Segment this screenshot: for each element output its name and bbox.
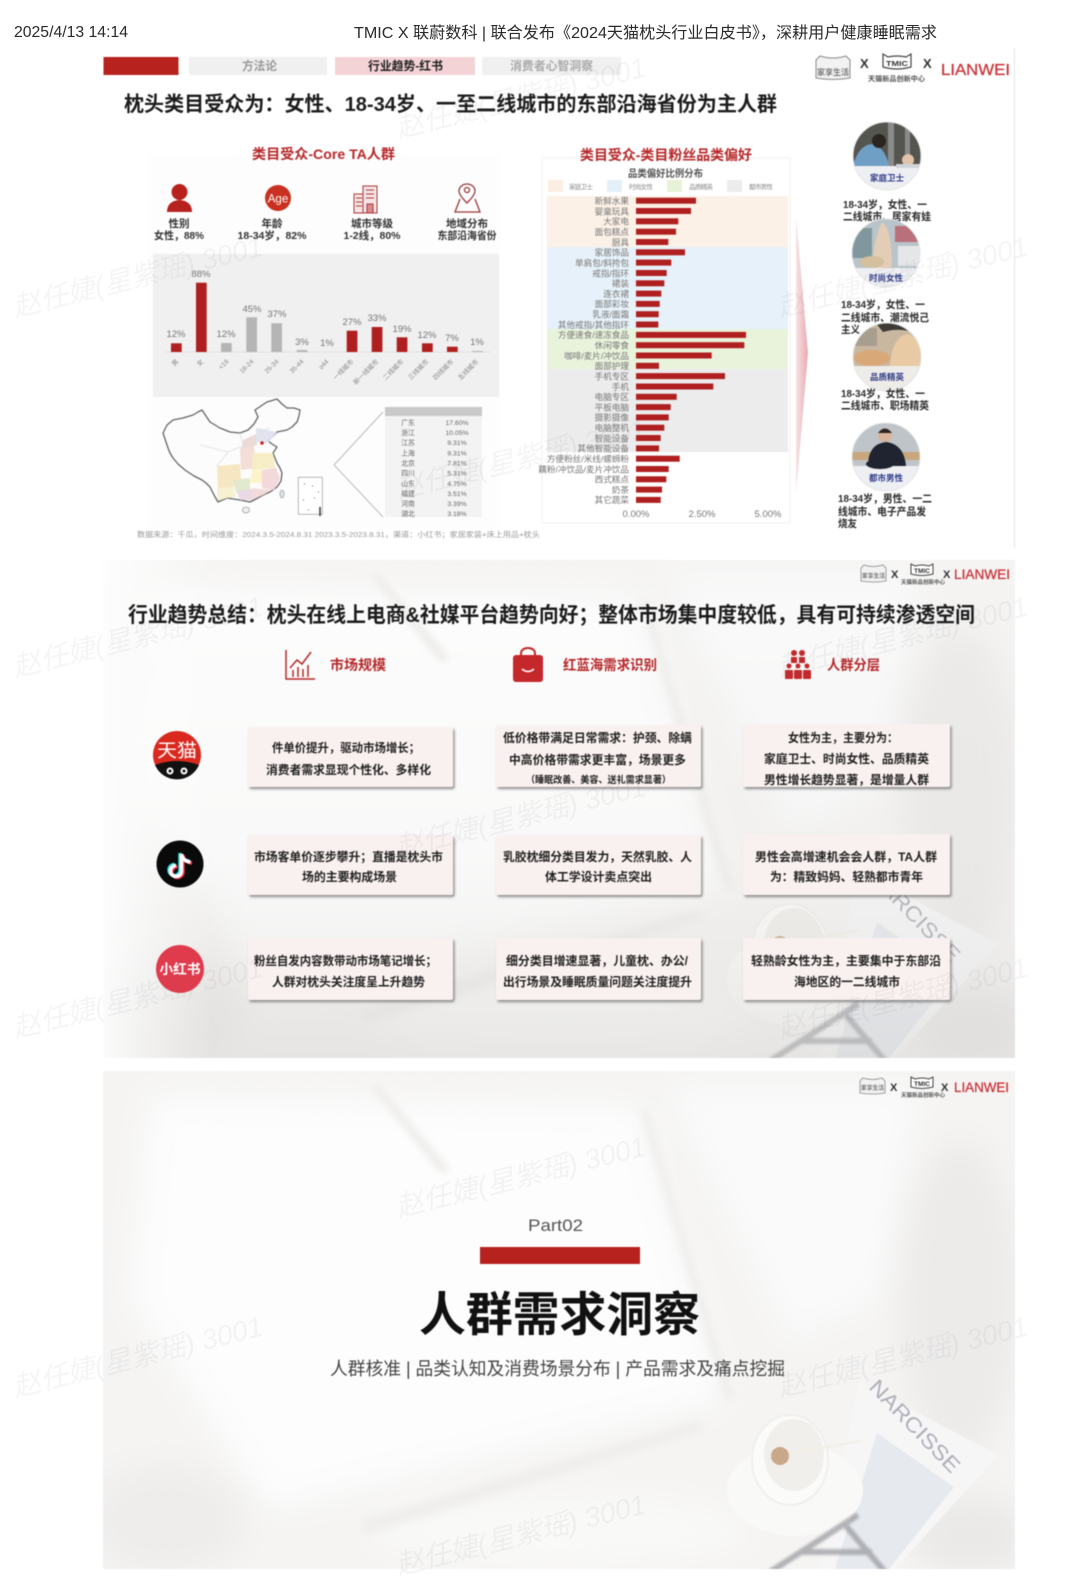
watermarks: 赵任婕(星紫瑶) 3001 bbox=[392, 1131, 649, 1223]
card: Xiaohongshu demand bbox=[496, 938, 701, 1000]
bar chart: audience split: 二线城市 bbox=[381, 357, 406, 382]
persona: urban male: 烧友 bbox=[838, 517, 857, 530]
persona: quality elite: 18-34岁，女性、一 bbox=[841, 387, 925, 400]
icon: Tmall bbox=[153, 731, 201, 779]
column heading: segments: 人群分层 bbox=[827, 657, 880, 673]
persona: fashion woman: 二线城市、潮流悦己 bbox=[841, 311, 929, 324]
card: Tmall segments: 女性为主，主要分为： bbox=[788, 730, 898, 745]
legend: 都市男性 bbox=[749, 182, 774, 191]
bar chart: audience split: 五线城市 bbox=[456, 357, 481, 382]
stat: city tier: 1-2线，80% bbox=[344, 229, 401, 242]
bar chart: preference ratio: 连衣裙 bbox=[603, 288, 629, 299]
bar chart: preference ratio: 乳液/面霜 bbox=[592, 308, 629, 320]
province table with pointer: 3.51% bbox=[447, 491, 467, 498]
card: Douyin market size: 市场客单价逐步攀升；直播是枕头市 bbox=[254, 849, 443, 864]
province table with pointer: 江苏 bbox=[401, 438, 415, 447]
bar chart: audience split: ≥44 bbox=[318, 358, 331, 371]
card: Tmall segments: 家庭卫士、时尚女性、品质精英 bbox=[764, 751, 929, 766]
card: Douyin segments: 为：精致妈妈、轻熟都市青年 bbox=[770, 869, 923, 884]
data source footnote: 数据来源：千瓜，时间维度：2024.3.5-2024.8.31 2023.3.5-2023.8.31，渠道：小红书；家居家装+床上用品+枕头 bbox=[137, 529, 541, 539]
watermarks: 赵任婕(星紫瑶) 3001 bbox=[774, 591, 1031, 683]
stat: city tier: 城市等级 bbox=[351, 217, 393, 230]
bar chart: preference ratio: 藕粉/冲饮品/麦片冲饮品 bbox=[538, 463, 629, 474]
province table with pointer: 山东 bbox=[401, 479, 415, 488]
card: Douyin demand: 体工学设计卖点突出 bbox=[545, 869, 652, 884]
page header: date: 2025/4/13 14:14 bbox=[14, 24, 128, 41]
bar chart: preference ratio: 面部彩妆 bbox=[595, 298, 629, 309]
province table with pointer: 湖北 bbox=[401, 509, 415, 518]
persona: urban male: 都市男性 bbox=[869, 473, 903, 483]
persona: fashion woman: 主义 bbox=[841, 323, 860, 336]
panel: category preference chart bbox=[538, 147, 790, 523]
bar chart: audience split: 12% bbox=[216, 329, 236, 340]
bar chart: audience split: 3% bbox=[295, 337, 309, 348]
bar chart: preference ratio: 大家电 bbox=[603, 216, 629, 227]
persona: fashion woman: 时尚女性 bbox=[869, 273, 903, 283]
partner logos: X bbox=[860, 56, 869, 71]
bar chart: audience split: 33% bbox=[367, 313, 387, 324]
card: Douyin segments bbox=[743, 834, 950, 895]
icon: city buildings bbox=[354, 186, 377, 213]
bar chart: preference ratio: 新鲜水果 bbox=[595, 195, 629, 206]
watermarks: 赵任婕(星紫瑶) 3001 bbox=[392, 52, 649, 144]
card: Xiaohongshu segments: 轻熟龄女性为主，主要集中于东部沿 bbox=[751, 953, 941, 968]
watermarks: 赵任婕(星紫瑶) 3001 bbox=[9, 952, 266, 1044]
partner logos: LIANWEI bbox=[954, 567, 1010, 582]
category bands bbox=[547, 196, 788, 452]
watermarks: 赵任婕(星紫瑶) 3001 bbox=[774, 1311, 1031, 1403]
watermarks: 赵任婕(星紫瑶) 3001 bbox=[9, 1311, 266, 1403]
card: Douyin market size: 场的主要构成场景 bbox=[302, 869, 397, 884]
persona: fashion woman: 18-34岁，女性、一 bbox=[841, 298, 925, 311]
bar chart: preference ratio: 面部护理 bbox=[595, 360, 629, 371]
panel heading: preference: 类目受众-类目粉丝品类偏好 bbox=[580, 147, 752, 163]
bar chart: audience split: 35-44 bbox=[289, 358, 306, 375]
persona: quality elite: 二线城市、职场精英 bbox=[841, 399, 929, 412]
slide 2: industry trend summary bbox=[85, 560, 1030, 1064]
card: Douyin market size bbox=[248, 835, 453, 895]
red divider bar bbox=[480, 1247, 640, 1264]
bar chart: preference ratio: 电脑专区 bbox=[595, 391, 629, 402]
province table with pointer: 9.31% bbox=[447, 450, 467, 458]
watermarks: 赵任婕(星紫瑶) 3001 bbox=[774, 952, 1031, 1044]
card: Xiaohongshu market size bbox=[248, 938, 453, 1000]
card: Xiaohongshu demand: 细分类目增速显著，儿童枕、办公/ bbox=[506, 953, 689, 968]
partner logos: X bbox=[890, 1082, 898, 1094]
background: bedding photo bbox=[85, 560, 1030, 1064]
card: Tmall segments bbox=[743, 724, 950, 787]
card: Tmall demand: 中高价格带需求更丰富，场景更多 bbox=[509, 752, 686, 767]
icon: shopping bag bbox=[513, 648, 543, 682]
province table with pointer: 4.75% bbox=[447, 481, 467, 488]
bar chart: audience split: 7% bbox=[445, 333, 459, 344]
stat: gender: 性别 bbox=[168, 217, 190, 230]
bar chart: audience split: 12% bbox=[166, 329, 186, 340]
arrow to personas bbox=[796, 217, 808, 493]
map of China bbox=[163, 399, 322, 516]
partner logos: X bbox=[943, 569, 951, 581]
background: bedding photo with cup and magazine bbox=[85, 1071, 1030, 1575]
stat: gender bbox=[154, 217, 205, 242]
icon: map pin bbox=[455, 184, 480, 212]
navigation tabs: 方法论 bbox=[242, 58, 277, 73]
card: Douyin demand: 乳胶枕细分类目发力，天然乳胶、人 bbox=[503, 849, 692, 864]
bar chart: preference ratio: 家居饰品 bbox=[595, 247, 629, 258]
partner logos: LIANWEI bbox=[941, 62, 1010, 79]
icon: age: Age bbox=[268, 194, 288, 206]
card: Xiaohongshu demand: 出行场景及睡眠质量问题关注度提升 bbox=[503, 974, 692, 989]
section subtitle: 人群核准 | 品类认知及消费场景分布 | 产品需求及痛点挖掘 bbox=[330, 1359, 785, 1379]
bar chart: preference ratio: 手机专区 bbox=[595, 370, 629, 381]
bar chart: preference ratio: 其他戒指/其他指环 bbox=[558, 319, 629, 330]
partner logos: 家享生活 bbox=[817, 67, 849, 77]
watermarks: 赵任婕(星紫瑶) 3001 bbox=[392, 771, 649, 863]
legend: 时尚女性 bbox=[629, 182, 654, 191]
partner logos: 家享生活 bbox=[861, 1084, 884, 1092]
icon: gender bbox=[167, 184, 192, 212]
chart subtitle: 品类偏好比例分布 bbox=[628, 167, 703, 180]
bar chart: preference ratio: 婴童玩具 bbox=[595, 205, 629, 216]
bar chart: audience split: 1% bbox=[320, 338, 334, 349]
partner logos bbox=[860, 1077, 1009, 1099]
bar chart: preference ratio: 厨具 bbox=[612, 237, 629, 247]
bar chart: audience split: 一线城市 bbox=[331, 357, 356, 382]
province table with pointer: 9.31% bbox=[447, 440, 467, 447]
legend: 家庭卫士 bbox=[569, 182, 594, 191]
persona: fashion woman bbox=[841, 218, 929, 336]
icon: Xiaohongshu: 小红书 bbox=[160, 961, 201, 977]
persona: family guardian: 家庭卫士 bbox=[870, 173, 904, 183]
section label: Part02 bbox=[528, 1216, 583, 1235]
province table with pointer: 7.81% bbox=[447, 460, 467, 468]
province table with pointer: 北京 bbox=[401, 458, 415, 468]
bar chart: audience split: 88% bbox=[191, 269, 211, 280]
watermarks: 赵任婕(星紫瑶) 3001 bbox=[9, 231, 266, 323]
slide title: 行业趋势总结：枕头在线上电商&社媒平台趋势向好；整体市场集中度较低，具有可持续渗透空间 bbox=[128, 603, 975, 627]
bar chart: audience split: 男 bbox=[170, 358, 180, 368]
slide 3: section cover bbox=[85, 1071, 1030, 1575]
bar chart: preference ratio: 摄影摄像 bbox=[595, 412, 629, 423]
stat: age: 年龄 bbox=[262, 217, 283, 230]
province table with pointer: 5.31% bbox=[447, 470, 467, 478]
icon: Xiaohongshu bbox=[156, 945, 204, 993]
partner logos: X bbox=[941, 1082, 949, 1094]
persona: quality elite bbox=[841, 322, 929, 412]
province table with pointer: 10.05% bbox=[445, 430, 469, 437]
bar chart: preference ratio: 智能设备 bbox=[595, 432, 629, 443]
navigation tabs bbox=[104, 57, 621, 75]
partner logos: X bbox=[891, 569, 899, 581]
bar chart: preference ratio: 西式糕点 bbox=[595, 474, 629, 485]
bar chart: preference ratio: 手机 bbox=[612, 381, 629, 392]
stat: gender: 女性，88% bbox=[154, 229, 205, 242]
bar chart: audience split: 四线城市 bbox=[431, 357, 456, 382]
bar chart: preference ratio: 方便粉丝/米线/螺蛳粉 bbox=[547, 453, 629, 464]
persona: urban male: 18-34岁，男性、一二 bbox=[838, 492, 932, 505]
partner logos: 天猫新品创新中心 bbox=[868, 74, 925, 83]
bar chart: audience split: 1% bbox=[470, 337, 484, 348]
bar chart: audience split: 27% bbox=[342, 317, 362, 328]
page header: document title: TMIC X 联蔚数科 | 联合发布《2024天猫枕头行业白皮书》，深耕用户健康睡眠需求 bbox=[354, 24, 937, 42]
legend: 品质精英 bbox=[689, 182, 714, 191]
legend bbox=[548, 180, 774, 192]
stat: age: 18-34岁，82% bbox=[238, 229, 307, 242]
province table with pointer: 上海 bbox=[401, 448, 415, 458]
column heading: market size: 市场规模 bbox=[330, 657, 386, 673]
partner logos: TMIC bbox=[914, 1082, 931, 1088]
persona: family guardian: 18-34岁，女性、一 bbox=[843, 198, 927, 211]
bar chart: preference ratio: 5.00% bbox=[755, 509, 782, 520]
stat: region: 东部沿海省份 bbox=[438, 229, 497, 242]
bar chart: preference ratio: 平板电脑 bbox=[595, 401, 629, 412]
card: Tmall market size: 消费者需求显现个性化、多样化 bbox=[266, 762, 431, 777]
persona: family guardian bbox=[843, 120, 931, 223]
bar chart: preference ratio: 休闲零食 bbox=[595, 340, 629, 350]
bar chart: audience split: 25-34 bbox=[264, 358, 281, 375]
card: Xiaohongshu market size: 粉丝自发内容数带动市场笔记增长； bbox=[254, 953, 437, 968]
card: Douyin demand bbox=[496, 835, 701, 895]
province table with pointer: 3.39% bbox=[447, 501, 467, 508]
watermarks: 赵任婕(星紫瑶) 3001 bbox=[392, 413, 649, 505]
bar chart: preference ratio: 2.50% bbox=[689, 509, 716, 520]
stat: region bbox=[438, 217, 497, 242]
bar chart: preference ratio: 其它蔬菜 bbox=[595, 494, 629, 505]
partner logos bbox=[816, 54, 1010, 83]
section heading: 人群需求洞察 bbox=[419, 1288, 700, 1341]
column heading: demand: 红蓝海需求识别 bbox=[563, 657, 657, 673]
card: Tmall demand bbox=[496, 725, 701, 787]
province table with pointer: 四川 bbox=[401, 470, 415, 478]
stat: region: 地域分布 bbox=[446, 217, 488, 230]
bar chart: audience split: 19% bbox=[392, 324, 412, 335]
bar chart: preference ratio: 咖啡/麦片/冲饮品 bbox=[564, 350, 629, 361]
partner logos: 天猫新品创新中心 bbox=[901, 1091, 945, 1099]
panel heading: Core TA: 类目受众-Core TA人群 bbox=[252, 146, 395, 162]
bar chart: preference ratio: 裙装 bbox=[612, 278, 629, 289]
watermarks: 赵任婕(星紫瑶) 3001 bbox=[9, 591, 266, 683]
bar chart: audience split: 18-24 bbox=[239, 358, 256, 375]
partner logos: 天猫新品创新中心 bbox=[901, 578, 945, 586]
bar chart: preference ratio: 电脑整机 bbox=[595, 422, 629, 433]
bar chart: preference ratio: 单肩包/斜挎包 bbox=[575, 257, 629, 268]
persona: urban male bbox=[838, 422, 932, 530]
slide 1: category audience bbox=[103, 48, 1015, 548]
watermarks: 赵任婕(星紫瑶) 3001 bbox=[392, 1489, 649, 1581]
province table with pointer: 广东 bbox=[401, 418, 415, 427]
bar chart: audience split: 女 bbox=[194, 357, 206, 368]
icon: people tiers bbox=[785, 650, 811, 679]
province table with pointer bbox=[334, 407, 482, 518]
panel: Core TA bbox=[148, 146, 500, 528]
bar chart: audience split: 45% bbox=[242, 304, 262, 315]
partner logos: LIANWEI bbox=[954, 1080, 1009, 1095]
watermarks: 赵任婕(星紫瑶) 3001 bbox=[774, 231, 1031, 323]
partner logos: X bbox=[923, 56, 932, 71]
bar chart: preference ratio: 方便速食/速冻食品 bbox=[558, 329, 629, 340]
bar chart: preference ratio: 面包糕点 bbox=[595, 226, 629, 237]
province table with pointer: 3.18% bbox=[447, 511, 467, 518]
bar chart: audience split: 37% bbox=[267, 309, 287, 320]
partner logos bbox=[861, 564, 1010, 586]
bar chart: preference ratio: 戒指/指环 bbox=[592, 267, 629, 278]
card: Tmall demand: （睡眠改善、美容、送礼需求显著） bbox=[526, 774, 671, 786]
stat: city tier bbox=[344, 217, 401, 242]
slide title: 枕头类目受众为：女性、18-34岁、一至二线城市的东部沿海省份为主人群 bbox=[124, 92, 777, 116]
bar chart: preference ratio: 0.00% bbox=[623, 509, 650, 520]
persona: urban male: 线城市、电子产品发 bbox=[838, 505, 926, 518]
province table with pointer: 浙江 bbox=[401, 428, 415, 437]
bar chart: preference ratio bbox=[538, 195, 782, 520]
icon: Tmall: 天猫 bbox=[157, 740, 197, 761]
bar chart: preference ratio: 其他智能设备 bbox=[577, 443, 629, 454]
card: Tmall market size bbox=[248, 727, 453, 787]
card: Xiaohongshu segments: 海地区的一二线城市 bbox=[794, 974, 900, 989]
card: Xiaohongshu market size: 人群对枕头关注度呈上升趋势 bbox=[272, 974, 425, 989]
partner logos: TMIC bbox=[914, 569, 931, 575]
partner logos: 家享生活 bbox=[862, 572, 885, 580]
card: Tmall segments: 男性增长趋势显著，是增量人群 bbox=[764, 772, 929, 787]
card: Tmall market size: 件单价提升，驱动市场增长； bbox=[272, 740, 420, 755]
bar chart: audience split: 三线城市 bbox=[406, 357, 431, 382]
province table with pointer: 河南 bbox=[401, 499, 415, 508]
province table with pointer: 17.60% bbox=[445, 420, 469, 427]
bar chart: preference ratio: 奶茶 bbox=[612, 484, 629, 495]
stat: age bbox=[238, 217, 307, 242]
bar chart: audience split bbox=[153, 254, 499, 397]
bar chart: audience split: <18 bbox=[218, 358, 231, 371]
bar chart: audience split: 新一线城市 bbox=[351, 357, 381, 386]
icon: age bbox=[265, 185, 291, 211]
card: Douyin segments: 男性会高增速机会会人群，TA人群 bbox=[755, 849, 937, 864]
province table with pointer: 福建 bbox=[401, 489, 415, 498]
persona: family guardian: 二线城市、居家有娃 bbox=[843, 210, 931, 223]
card: Xiaohongshu segments bbox=[743, 938, 950, 1000]
icon: Douyin bbox=[156, 840, 204, 888]
navigation tabs: 行业趋势-红书 bbox=[368, 58, 443, 73]
bar chart: audience split: 12% bbox=[417, 330, 437, 341]
icon: market size chart bbox=[286, 650, 315, 679]
persona: quality elite: 品质精英 bbox=[870, 372, 904, 382]
card: Tmall demand: 低价格带满足日常需求：护颈、除螨 bbox=[503, 730, 692, 745]
navigation tabs: 消费者心智洞察 bbox=[510, 58, 593, 73]
partner logos: TMIC bbox=[886, 59, 909, 68]
